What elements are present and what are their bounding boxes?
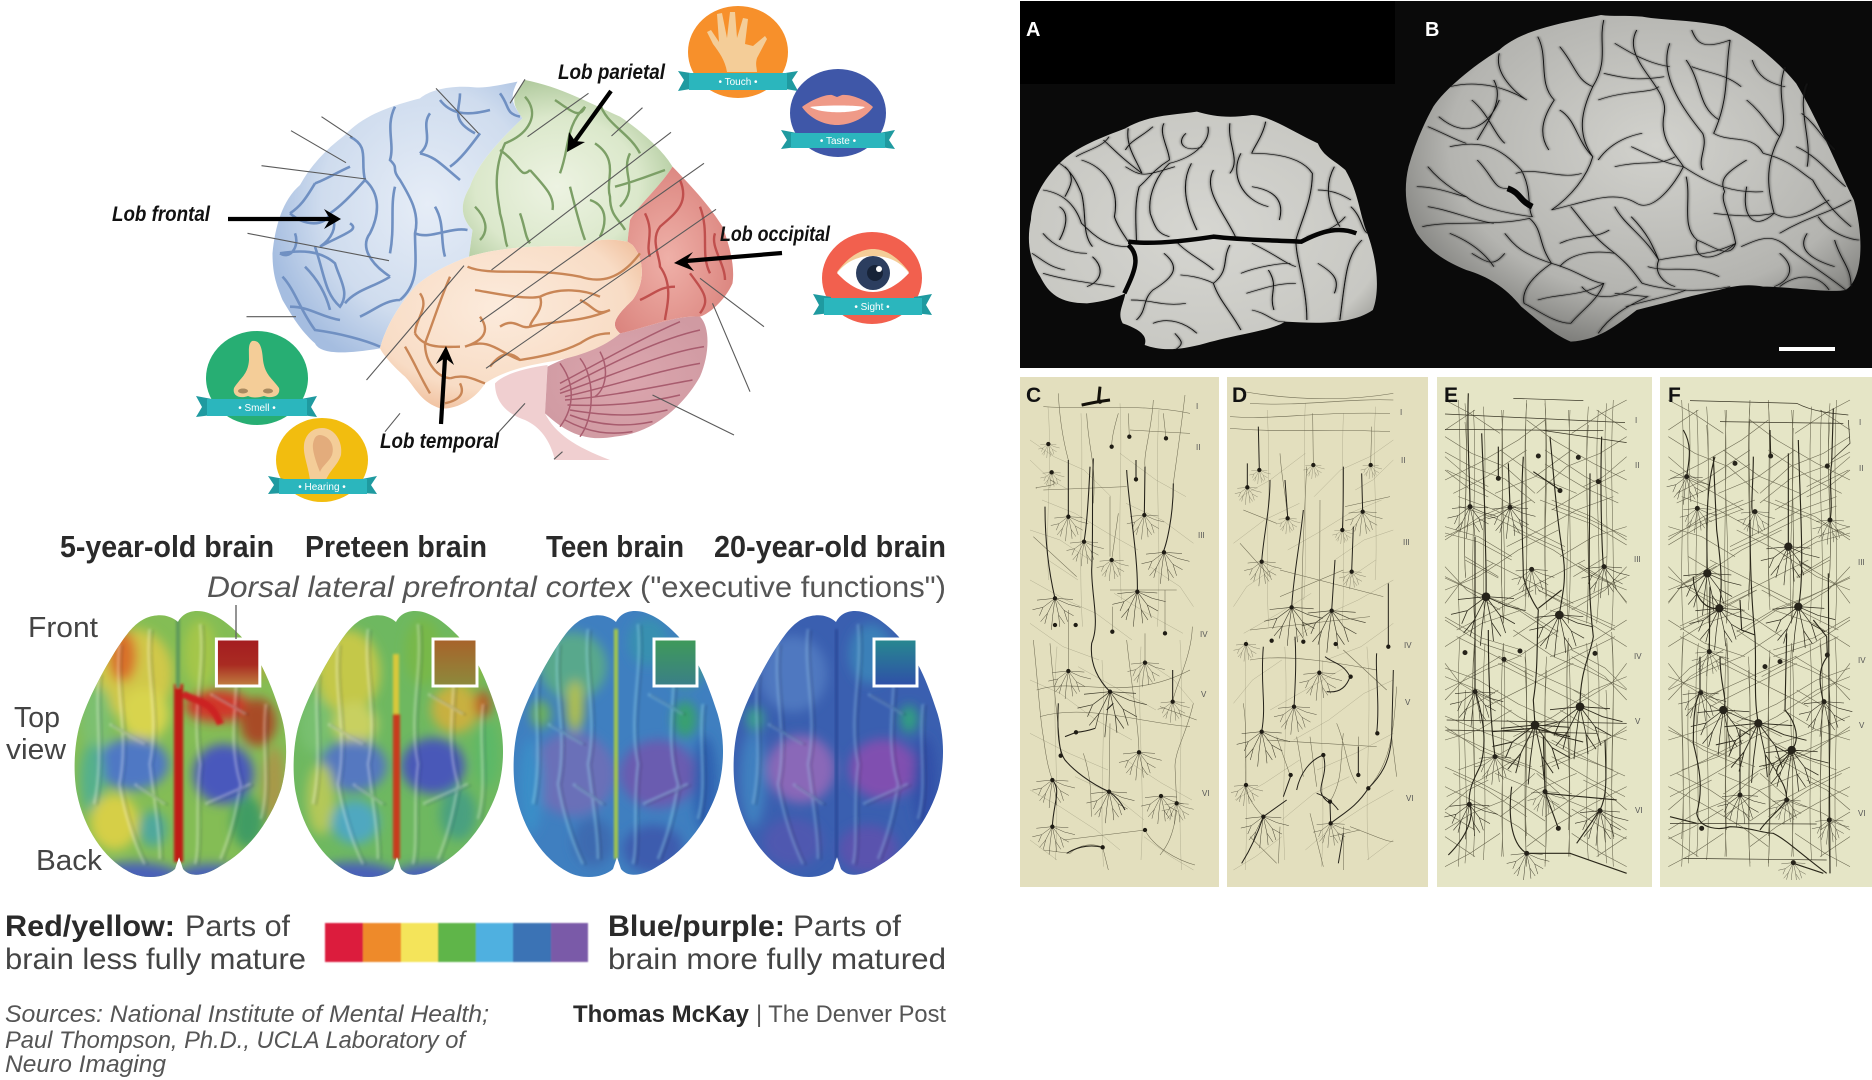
- legend: blue/purple: Blue/purple:: [608, 910, 785, 943]
- legend: red/yellow: Parts of: [185, 910, 291, 943]
- axon horizontals in layer I: [1445, 398, 1627, 733]
- brain A folds: [1032, 122, 1367, 350]
- panel: photographs A and B: [1020, 1, 1872, 368]
- legend: red/yellow: Red/yellow:: [5, 910, 175, 943]
- icon: touch medallion: • Touch •: [718, 77, 758, 88]
- label: Top view: [6, 702, 67, 766]
- parietal lobe folds: [475, 97, 665, 247]
- sources note: Sources: National Institute of Mental Health;: [5, 1001, 489, 1028]
- gyri texture: [313, 624, 483, 864]
- neuron dendrite fans: [1444, 507, 1629, 881]
- layer numerals D: I: [1400, 408, 1402, 417]
- large cell bodies: [1707, 547, 1798, 750]
- label: C: C: [1026, 384, 1041, 407]
- icon: hearing medallion: • Hearing •: [298, 482, 346, 493]
- layer numerals E: III: [1634, 555, 1641, 564]
- label: Top view: view: [6, 734, 67, 766]
- sources note: Neuro Imaging: [5, 1051, 167, 1078]
- highlighted prefrontal box: [433, 639, 477, 686]
- heading: 20-year-old brain: 20-year-old brain: [714, 529, 946, 564]
- icon: taste medallion: • Taste •: [820, 136, 857, 147]
- caption: dorsal lateral prefrontal cortex: Dorsal lateral prefrontal cortex: [207, 571, 633, 604]
- layer numerals E: II: [1635, 461, 1639, 470]
- icon: sight medallion: • Sight •: [854, 302, 890, 313]
- layer numerals C: V: [1201, 690, 1207, 699]
- layer numerals C: III: [1198, 531, 1205, 540]
- layer numerals C: I: [1196, 402, 1198, 411]
- dark hollow on brain B: [1508, 188, 1532, 207]
- layer numerals D: II: [1401, 456, 1405, 465]
- layer numerals F: IV: [1858, 656, 1866, 665]
- legend: red/yellow: [5, 910, 306, 976]
- chart: 5-year-old brain scan: [69, 609, 291, 890]
- neuron dendrite fans: [1667, 477, 1852, 884]
- arrow: Lob parietal: [567, 91, 611, 152]
- layer numerals E: VI: [1635, 806, 1643, 815]
- label: Lob parietal: Lob parietal: [558, 61, 666, 84]
- photo background: [1020, 1, 1872, 368]
- illustration: side view of the brain: [272, 80, 733, 460]
- layer numerals C: VI: [1202, 789, 1210, 798]
- neuron main trunks: [1670, 408, 1833, 873]
- panel: neuron drawing C: [1020, 377, 1219, 887]
- layer numerals D: [1400, 408, 1414, 803]
- legend: red/yellow: brain less fully mature: [5, 943, 306, 976]
- label: B: B: [1425, 19, 1439, 41]
- legend: blue/purple: Parts of: [793, 910, 902, 943]
- leader line to prefrontal box: [235, 605, 237, 639]
- gyri texture: [753, 624, 923, 864]
- parietal lobe: [463, 80, 672, 257]
- caption: dorsal lateral prefrontal cortex: ("executive functions"): [640, 571, 946, 604]
- icon: sight medallion: [813, 232, 932, 324]
- arrow: Lob frontal: [228, 209, 341, 229]
- layer numerals F: VI: [1858, 809, 1866, 818]
- background fibre tangle: [1030, 403, 1193, 870]
- legend: blue/purple: [608, 910, 946, 976]
- icon: smell medallion: • Smell •: [238, 403, 276, 414]
- layer numerals F: V: [1859, 721, 1865, 730]
- caption: dorsal lateral prefrontal cortex: [207, 571, 946, 604]
- label: Front: Front: [28, 612, 98, 644]
- sources note: [5, 1001, 489, 1078]
- heading: Preteen brain: Preteen brain: [305, 529, 487, 564]
- scale bar: [1779, 347, 1835, 351]
- label: E: E: [1444, 384, 1458, 407]
- icon: hearing medallion: [268, 418, 377, 502]
- legend: colour scale bar: [325, 923, 588, 962]
- label: Lob occipital: Lob occipital: [720, 223, 831, 246]
- sources note: Paul Thompson, Ph.D., UCLA Laboratory of: [5, 1027, 467, 1054]
- temporal lobe: [380, 240, 642, 409]
- neuron cell bodies: [1048, 402, 1177, 847]
- neuron dendrite fans: [1231, 465, 1382, 848]
- layer numerals E: I: [1635, 416, 1637, 425]
- axon horizontals in layer I: [1670, 401, 1850, 860]
- heading: Teen brain: Teen brain: [546, 529, 684, 564]
- cerebellum folds: [560, 322, 704, 437]
- neuron cell bodies: [1687, 456, 1830, 863]
- neuron cell bodies: [1246, 465, 1388, 823]
- label: Back: Back: [36, 845, 102, 877]
- leader lines: [246, 79, 764, 459]
- panel: neuron drawing D: [1227, 377, 1428, 887]
- layer numerals D: VI: [1406, 794, 1414, 803]
- frontal lobe: [272, 82, 522, 352]
- layer numerals F: I: [1859, 418, 1861, 427]
- highlighted prefrontal box: [216, 639, 260, 686]
- credit: Thomas McKay: [573, 1001, 750, 1028]
- highlighted prefrontal box: [654, 639, 697, 686]
- icon: smell medallion: [196, 331, 317, 425]
- photo: brain A: [1029, 112, 1377, 350]
- layer numerals C: II: [1196, 443, 1200, 452]
- panel: brain maturation over age: [5, 529, 948, 1078]
- lateral fissure of brain A: [1124, 230, 1356, 293]
- fine neuron fibres: [1033, 393, 1197, 870]
- label: F: F: [1668, 384, 1681, 407]
- dark cell cluster at top: [1082, 387, 1110, 405]
- icon: touch medallion: [678, 6, 798, 98]
- label: Top view: Top: [14, 702, 60, 734]
- large cell bodies: [1486, 597, 1580, 725]
- cerebellum: [545, 317, 708, 438]
- fine neuron fibres: [1445, 400, 1627, 867]
- panel: neuron drawing E: [1437, 377, 1652, 887]
- background fibre tangle: [1233, 403, 1393, 870]
- arrow: Lob temporal: [436, 346, 454, 424]
- neuron cell bodies: [1465, 456, 1604, 853]
- chart: 20-year-old brain scan: [728, 609, 948, 884]
- label: A: A: [1026, 19, 1040, 41]
- label: Lob frontal: Lob frontal: [112, 203, 211, 226]
- layer numerals F: III: [1858, 558, 1865, 567]
- fine neuron fibres: [1668, 400, 1850, 867]
- layer numerals E: IV: [1634, 652, 1642, 661]
- layer numerals C: [1196, 402, 1210, 798]
- label: D: D: [1232, 384, 1247, 407]
- gyri texture: [94, 624, 266, 864]
- brain B folds: [1417, 20, 1859, 333]
- heading: 5-year-old brain: 5-year-old brain: [60, 529, 274, 564]
- temporal lobe folds: [405, 253, 640, 403]
- credit: [573, 1001, 946, 1028]
- gyri texture: [533, 624, 703, 864]
- credit: | The Denver Post: [756, 1001, 946, 1028]
- occipital lobe: [615, 167, 733, 333]
- chart: preteen brain scan: [288, 609, 508, 890]
- photo: brain B: [1406, 15, 1860, 342]
- brainstem: [495, 365, 610, 460]
- neuron main trunks: [1242, 427, 1393, 863]
- layer numerals D: IV: [1404, 641, 1412, 650]
- neuron main trunks: [1448, 393, 1627, 873]
- layer numerals E: V: [1635, 717, 1641, 726]
- layer numerals F: II: [1859, 464, 1863, 473]
- neuron main trunks: [1045, 387, 1173, 853]
- panel: neuron drawing F: [1660, 377, 1872, 887]
- chart: teen brain scan: [508, 609, 728, 884]
- frontal lobe folds: [280, 93, 520, 347]
- legend: blue/purple: brain more fully matured: [608, 943, 946, 976]
- layer numerals D: V: [1405, 698, 1411, 707]
- highlighted prefrontal box: [874, 639, 917, 686]
- occipital lobe folds: [640, 180, 725, 320]
- arrow: Lob occipital: [674, 252, 782, 271]
- layer numerals F: [1858, 418, 1866, 818]
- label: Lob temporal: Lob temporal: [380, 430, 500, 453]
- layer numerals E: [1634, 416, 1643, 815]
- icon: taste medallion: [781, 69, 895, 157]
- panel: lobes of the brain diagram: [112, 6, 932, 502]
- layer numerals C: IV: [1200, 630, 1208, 639]
- fine neuron fibres: [1230, 392, 1397, 870]
- neuron dendrite fans: [1032, 444, 1194, 855]
- layer numerals D: III: [1403, 538, 1410, 547]
